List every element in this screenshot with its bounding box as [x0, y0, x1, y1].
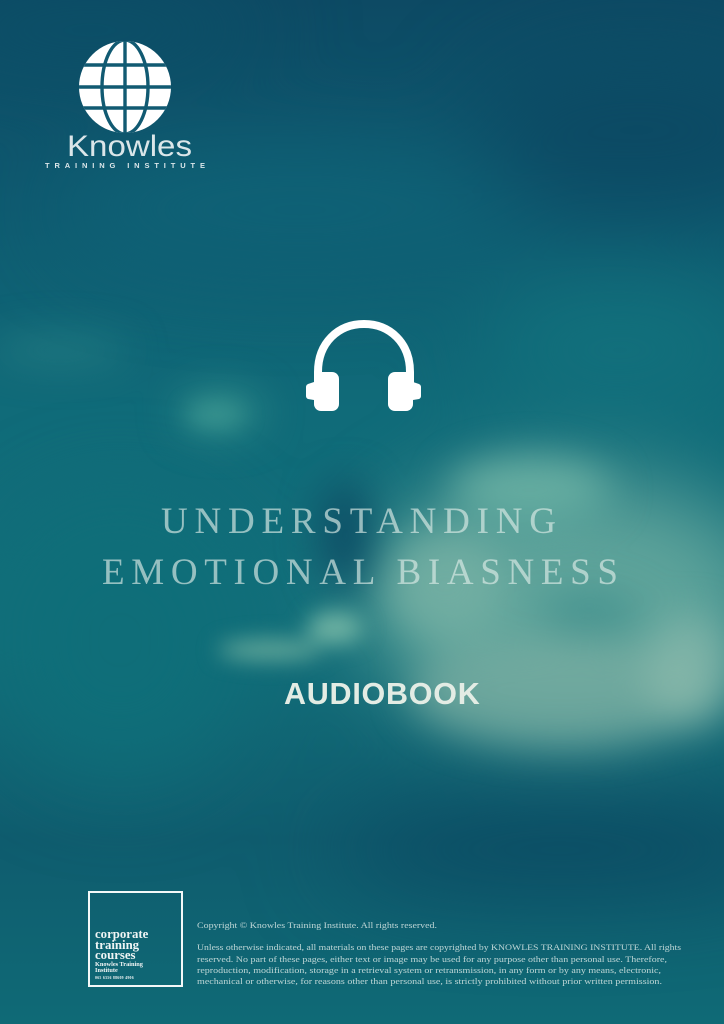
- copyright notice: reserved. No part of these pages, either text or image may be used for any purpose other than personal use. Therefore,: [197, 954, 667, 964]
- badge contact line: 065 6356 88609 4906: [95, 976, 134, 980]
- title: UNDERSTANDING: [161, 501, 556, 542]
- logo wordmark: Knowles: [67, 130, 192, 163]
- badge subheading: Institute: [95, 967, 118, 974]
- copyright notice: reproduction, modification, storage in a retrieval system or retransmission, in any form or by any means, electronic,: [197, 965, 661, 975]
- icon: globe: [79, 41, 171, 133]
- title: [102, 501, 618, 590]
- logo tagline: TRAINING INSTITUTE: [45, 161, 205, 170]
- copyright notice: [197, 920, 682, 986]
- badge subheading: [95, 961, 143, 974]
- logo: Knowles Training Institute: [45, 41, 205, 170]
- badge heading: [95, 927, 148, 962]
- badge: corporate training courses: [88, 891, 183, 987]
- subtitle: audiobook: AUDIOBOOK: [284, 677, 481, 711]
- copyright notice: Copyright © Knowles Training Institute. All rights reserved.: [197, 920, 437, 930]
- copyright notice: mechanical or otherwise, for reasons other than personal use, is strictly prohibited without prior written permission.: [197, 976, 662, 986]
- copyright notice: Unless otherwise indicated, all materials on these pages are copyrighted by KNOWLES TRAINING INSTITUTE. All rights: [197, 942, 682, 952]
- badge heading: courses: [95, 948, 136, 962]
- badge heading: corporate: [95, 927, 148, 941]
- badge heading: training: [95, 938, 139, 952]
- icon: headphones: [306, 320, 421, 411]
- badge subheading: Knowles Training: [95, 961, 143, 968]
